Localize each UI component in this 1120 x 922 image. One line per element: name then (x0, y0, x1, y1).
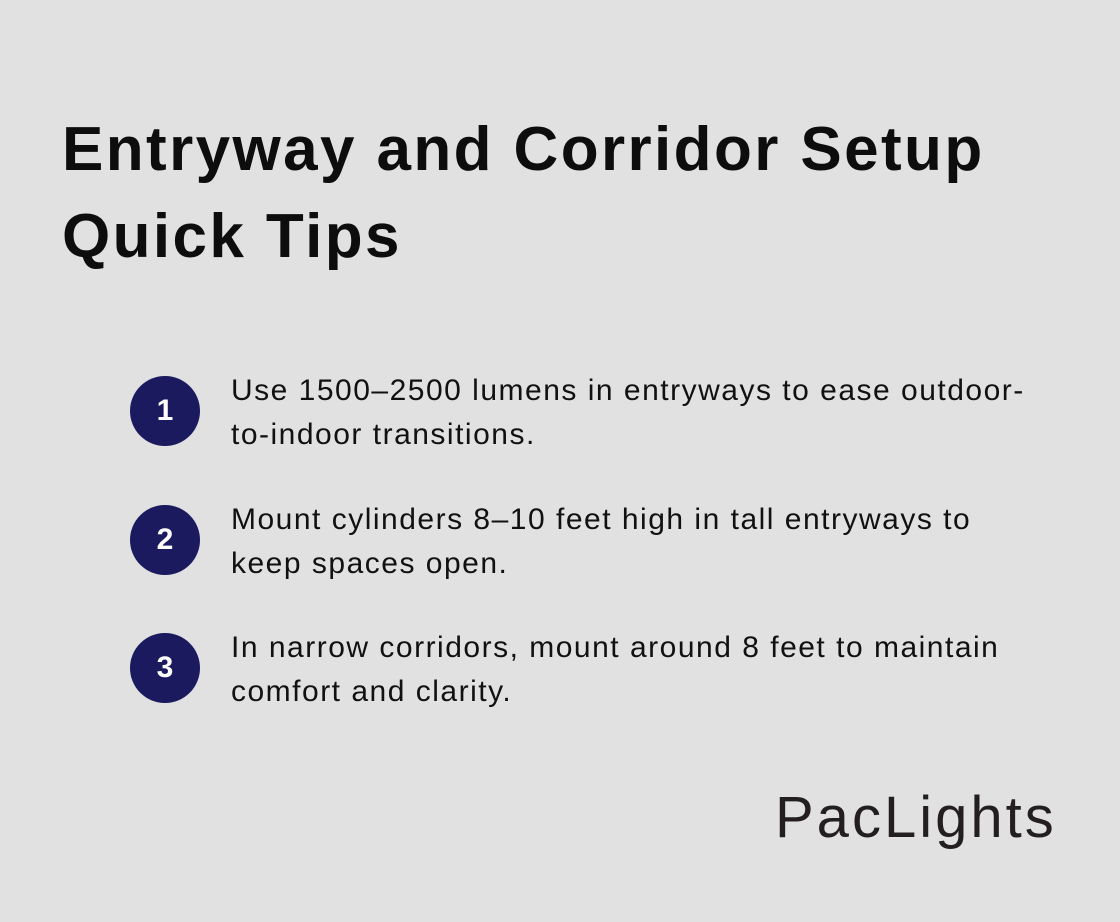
tip 1 text: to-indoor transitions. (231, 418, 536, 451)
tip 1 (130, 374, 1025, 451)
title: Quick Tips (62, 202, 402, 271)
badge 1 (130, 376, 200, 446)
tip 2 text: Mount cylinders 8–10 feet high in tall entryways to (231, 503, 971, 536)
title: Entryway and Corridor Setup (62, 115, 985, 184)
tip 3 text: In narrow corridors, mount around 8 feet to maintain (231, 631, 999, 664)
badge 3 (130, 633, 200, 703)
tip 2 (130, 503, 971, 580)
title (62, 115, 985, 271)
tip 1 text (231, 374, 1025, 451)
tip 3 (130, 631, 999, 708)
badge 2 (130, 505, 200, 575)
tip 3 text (231, 631, 999, 708)
badge 3: 3 (157, 651, 173, 684)
tip 2 text: keep spaces open. (231, 547, 508, 580)
tip 1 text: Use 1500–2500 lumens in entryways to ease outdoor- (231, 374, 1025, 407)
tip 2 text (231, 503, 971, 580)
logo: PacLights (775, 785, 1057, 850)
badge 1: 1 (157, 394, 173, 427)
badge 2: 2 (157, 523, 173, 556)
tip 3 text: comfort and clarity. (231, 675, 512, 708)
